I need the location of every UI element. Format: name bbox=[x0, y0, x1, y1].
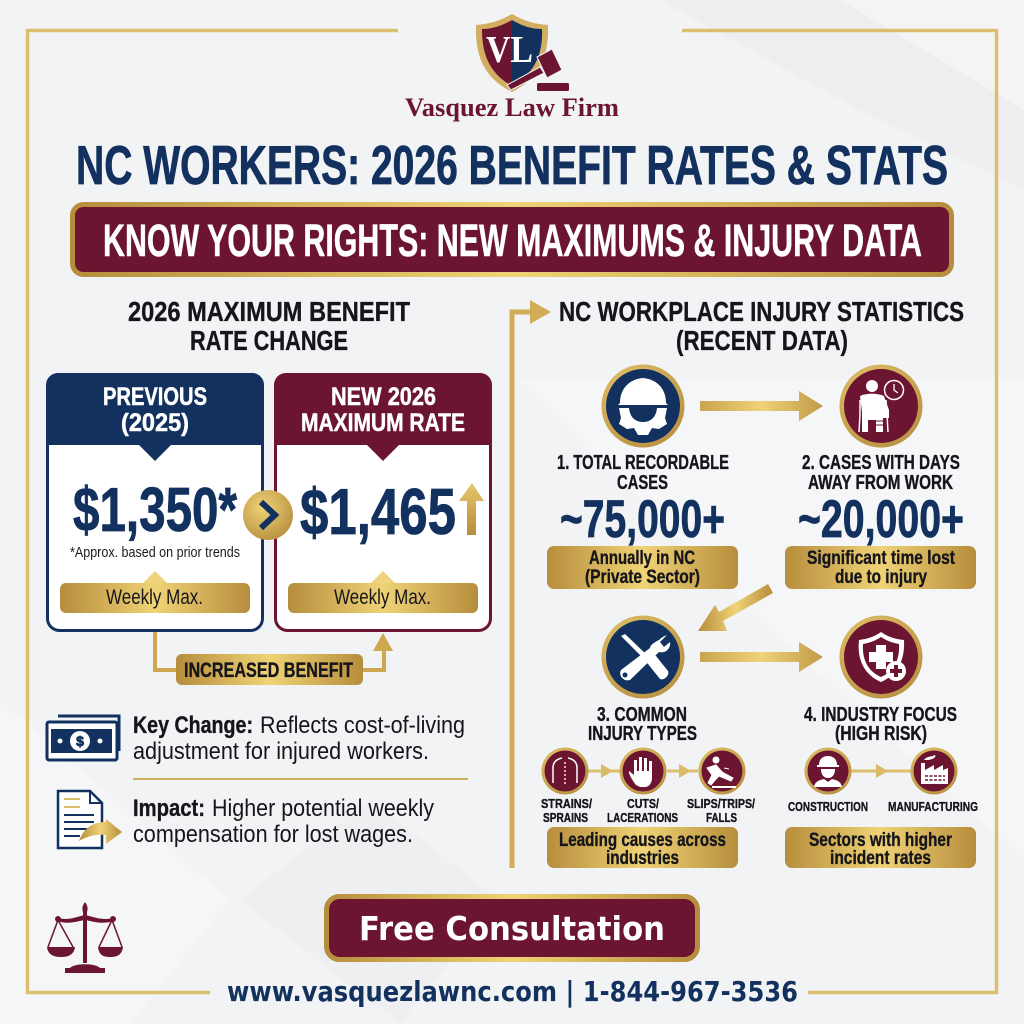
stat 4: industry focus: (HIGH RISK) bbox=[835, 723, 927, 745]
stat 1: total recordable cases: ~75,000+ bbox=[560, 490, 725, 549]
arrow: 1 to 2 bbox=[700, 391, 823, 421]
icon: chevron between cards bbox=[243, 490, 293, 540]
stat 1: total recordable cases: 1. TOTAL RECORDABLE bbox=[557, 452, 729, 474]
stat 1: total recordable cases bbox=[547, 364, 738, 589]
text: key change bbox=[133, 712, 465, 765]
card: previous 2025 bbox=[46, 373, 264, 630]
icon: shield and gavel bbox=[476, 14, 569, 92]
logo: Vasquez Law Firm: Vasquez Law Firm bbox=[405, 93, 619, 122]
heading: rate change: RATE CHANGE bbox=[190, 325, 348, 356]
card: new 2026 maximum rate: Weekly Max. bbox=[334, 586, 431, 609]
panel: 2026 maximum benefit rate change bbox=[46, 296, 492, 848]
injury type labels: FALLS bbox=[706, 810, 737, 825]
panel: NC workplace injury statistics bbox=[541, 296, 978, 869]
text: impact: Higher potential weekly bbox=[212, 795, 434, 822]
heading: injury statistics bbox=[559, 296, 964, 356]
injury type labels: CUTS/ bbox=[627, 796, 659, 811]
connector: increased benefit: INCREASED BENEFIT bbox=[184, 659, 353, 682]
icon: shield with medical cross bbox=[840, 616, 922, 698]
injury type labels: SPRAINS bbox=[543, 810, 588, 825]
stat 1: total recordable cases: (Private Sector) bbox=[585, 567, 700, 588]
icon: factory bbox=[910, 748, 958, 794]
icon: hard hat and gear bbox=[602, 364, 684, 448]
card: previous 2025: PREVIOUS bbox=[103, 383, 207, 411]
stat 2: days away from work: ~20,000+ bbox=[798, 490, 964, 549]
industry labels: MANUFACTURING bbox=[888, 799, 978, 814]
icon: cut hand bbox=[620, 748, 666, 794]
icon: slipping person bbox=[698, 748, 746, 794]
button: free consultation bbox=[326, 896, 698, 960]
stat 3: common injury types bbox=[541, 616, 755, 869]
text: impact: Impact: bbox=[133, 795, 205, 822]
text: key change: Key Change: bbox=[133, 712, 253, 739]
stat 4: industry focus: incident rates bbox=[830, 848, 931, 869]
injury type labels bbox=[541, 796, 755, 825]
heading: injury statistics: (RECENT DATA) bbox=[676, 325, 848, 356]
text: key change: adjustment for injured workers. bbox=[133, 738, 429, 765]
footer: website and phone: www.vasquezlawnc.com | 1-844-967-3536 bbox=[227, 975, 798, 1008]
text: key change: Reflects cost-of-living bbox=[260, 712, 465, 739]
injury type labels: SLIPS/TRIPS/ bbox=[687, 796, 755, 811]
stat 3: common injury types: INJURY TYPES bbox=[588, 723, 697, 745]
connector: increased benefit bbox=[155, 632, 393, 685]
injury type labels: STRAINS/ bbox=[541, 796, 592, 811]
icon: document with arrow bbox=[58, 791, 122, 848]
card: previous 2025: (2025) bbox=[121, 409, 189, 437]
icon: shield and gavel: VL bbox=[486, 29, 533, 71]
card: previous 2025: $1,350* bbox=[73, 476, 238, 545]
icon: up arrow bbox=[459, 483, 484, 535]
small arrows between injury types bbox=[588, 770, 698, 772]
stat 2: days away from work: 2. CASES WITH DAYS bbox=[802, 452, 960, 474]
stat 2: days away from work: Significant time lost bbox=[807, 548, 956, 569]
stat 3: common injury types: industries bbox=[606, 848, 679, 869]
text: impact bbox=[133, 795, 434, 848]
card: previous 2025: *Approx. based on prior trends bbox=[70, 544, 240, 561]
icon: scales of justice bbox=[47, 902, 123, 973]
stat 1: total recordable cases: CASES bbox=[617, 472, 668, 494]
industry labels bbox=[788, 799, 978, 814]
stat 3: common injury types: Leading causes across bbox=[559, 830, 726, 851]
small arrow between industries bbox=[851, 764, 911, 778]
banner: know your rights bbox=[72, 204, 952, 274]
icon: crossed wrench and screwdriver bbox=[602, 616, 684, 698]
vertical gold arrow to statistics bbox=[512, 300, 551, 868]
text: impact: compensation for lost wages. bbox=[133, 821, 413, 848]
icon: strains and sprains bbox=[542, 748, 588, 794]
arrow: 2 to 3 bbox=[698, 584, 773, 631]
stat 2: days away from work bbox=[785, 364, 976, 589]
stat 2: days away from work: due to injury bbox=[835, 567, 927, 588]
heading: rate change: 2026 MAXIMUM BENEFIT bbox=[128, 296, 410, 327]
icon: person on crutches with clock bbox=[840, 364, 922, 448]
industry labels: CONSTRUCTION bbox=[788, 799, 868, 814]
injury type labels: LACERATIONS bbox=[607, 810, 678, 825]
button: free consultation: Free Consultation bbox=[359, 909, 665, 948]
card: new 2026 maximum rate: NEW 2026 bbox=[331, 383, 436, 411]
heading: rate change bbox=[128, 296, 410, 356]
stat 4: industry focus: Sectors with higher bbox=[809, 830, 952, 851]
card: new 2026 maximum rate: MAXIMUM RATE bbox=[301, 409, 465, 437]
card: new 2026 maximum rate bbox=[274, 373, 492, 630]
arrow: 3 to 4 bbox=[700, 642, 823, 672]
stat 3: common injury types: 3. COMMON bbox=[597, 704, 687, 726]
card: previous 2025: Weekly Max. bbox=[106, 586, 203, 609]
stat 4: industry focus bbox=[785, 616, 978, 869]
icon: money bills: $ bbox=[76, 733, 84, 749]
card: new 2026 maximum rate: $1,465 bbox=[300, 475, 456, 548]
stat 2: days away from work: AWAY FROM WORK bbox=[808, 472, 953, 494]
icon: money bills bbox=[47, 716, 119, 760]
stat 1: total recordable cases: Annually in NC bbox=[589, 548, 695, 569]
logo: Vasquez Law Firm bbox=[405, 14, 619, 122]
icon: construction worker bbox=[804, 748, 852, 794]
stat 4: industry focus: 4. INDUSTRY FOCUS bbox=[804, 704, 957, 726]
